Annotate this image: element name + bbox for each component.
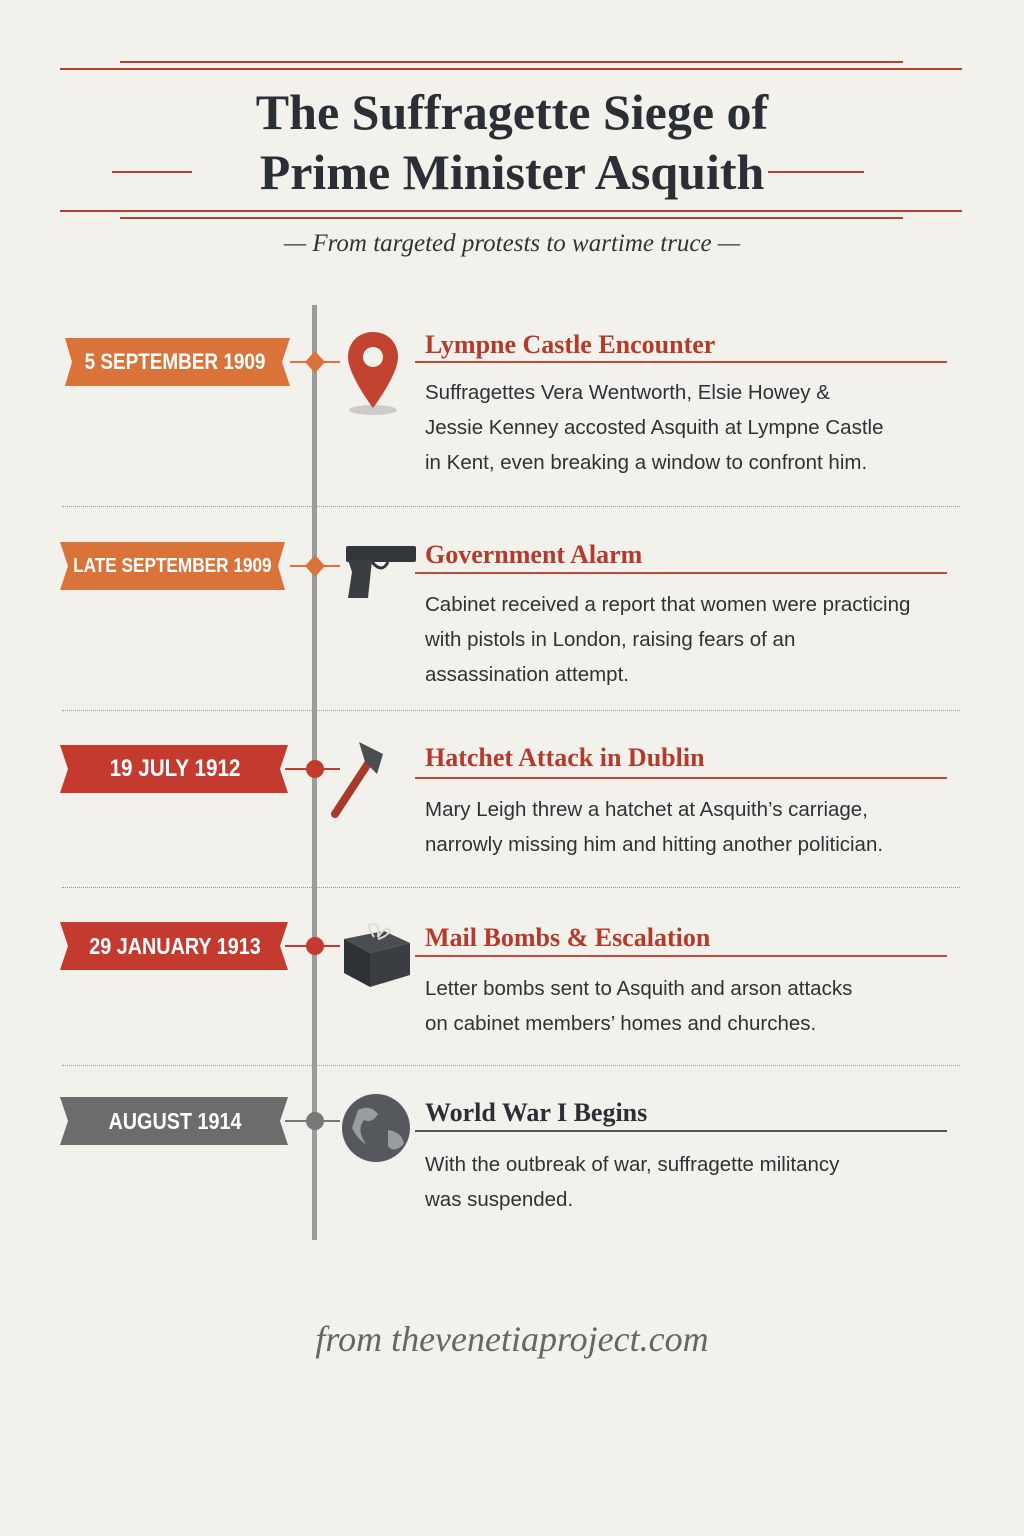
text: was suspended. <box>425 1188 573 1211</box>
ribbon: 29 January 1913: 29 JANUARY 1913 <box>89 933 261 959</box>
text: in Kent, even breaking a window to confront him. <box>425 451 867 474</box>
ribbon: 5 September 1909 <box>65 338 290 386</box>
heading: Mail Bombs & Escalation <box>425 923 710 952</box>
ribbon: 19 July 1912 <box>60 745 288 793</box>
footer: from thevenetiaproject.com <box>315 1319 709 1359</box>
event 2 <box>60 540 947 686</box>
text: Jessie Kenney accosted Asquith at Lympne Castle <box>425 416 883 439</box>
event 3 <box>60 742 947 856</box>
heading: Lympne Castle Encounter <box>425 330 715 359</box>
event 1 <box>65 330 947 474</box>
ribbon: August 1914: AUGUST 1914 <box>108 1108 242 1134</box>
ribbon: 5 September 1909: 5 SEPTEMBER 1909 <box>85 349 265 374</box>
ribbon: late September 1909: LATE SEPTEMBER 1909 <box>73 555 272 577</box>
event 5 <box>60 1094 947 1211</box>
node <box>290 351 340 373</box>
ribbon: 19 July 1912: 19 JULY 1912 <box>110 755 240 782</box>
text: assassination attempt. <box>425 663 629 686</box>
text: Letter bombs sent to Asquith and arson attacks <box>425 977 852 1000</box>
node <box>285 760 340 778</box>
text <box>425 977 852 1035</box>
icon: pistol <box>346 546 416 598</box>
timeline line <box>312 305 317 1240</box>
ribbon: 29 January 1913 <box>60 922 288 970</box>
text: with pistols in London, raising fears of an <box>425 628 795 651</box>
text <box>425 1153 840 1211</box>
title: Prime Minister Asquith <box>260 144 764 200</box>
title: The Suffragette Siege of <box>256 84 768 140</box>
heading: Hatchet Attack in Dublin <box>425 743 705 772</box>
heading: Government Alarm <box>425 540 642 569</box>
text <box>425 798 883 856</box>
node <box>285 937 340 955</box>
icon: hatchet <box>331 742 383 818</box>
ribbon: late September 1909 <box>60 542 285 590</box>
node <box>290 555 340 577</box>
node <box>285 1112 340 1130</box>
text <box>425 593 910 686</box>
title <box>256 84 769 200</box>
subtitle: — From targeted protests to wartime truce — <box>284 230 740 257</box>
icon: map pin <box>348 332 398 415</box>
text: Mary Leigh threw a hatchet at Asquith’s carriage, <box>425 798 868 821</box>
text: Cabinet received a report that women were practicing <box>425 593 910 616</box>
heading: World War I Begins <box>425 1098 647 1127</box>
text <box>425 381 883 474</box>
event 4 <box>60 922 947 1035</box>
text: Suffragettes Vera Wentworth, Elsie Howey & <box>425 381 830 404</box>
text: narrowly missing him and hitting another politician. <box>425 833 883 856</box>
text: on cabinet members’ homes and churches. <box>425 1012 816 1035</box>
icon: globe <box>342 1094 410 1162</box>
icon: parcel bomb <box>344 923 410 987</box>
ribbon: August 1914 <box>60 1097 288 1145</box>
text: With the outbreak of war, suffragette militancy <box>425 1153 839 1176</box>
